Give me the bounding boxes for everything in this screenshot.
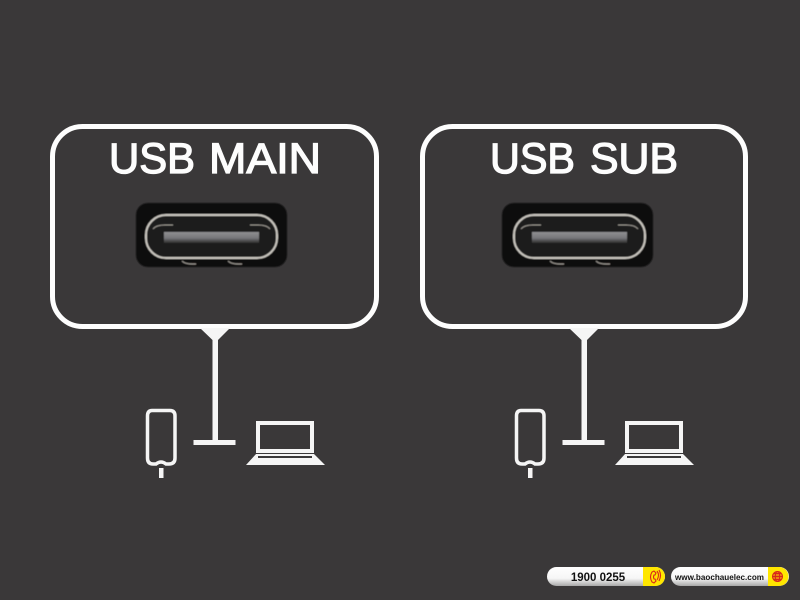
icon: phone sub — [516, 410, 544, 478]
panel outline: USB SUB — [422, 126, 746, 326]
hotline badge — [547, 567, 665, 586]
panel: USB MAIN — [52, 126, 376, 478]
connector line: USB SUB — [562, 328, 604, 445]
heading: USB MAIN — [109, 136, 321, 183]
phone number: 1900 0255 — [571, 572, 626, 584]
port: USB-C main — [136, 203, 287, 267]
panel: USB SUB — [422, 126, 746, 478]
connector line: USB MAIN — [194, 328, 236, 445]
website badge — [671, 567, 789, 586]
icon: globe — [772, 572, 782, 582]
icon: phone handset — [650, 570, 660, 583]
icon: phone main — [148, 410, 175, 478]
icon: laptop sub — [615, 423, 694, 465]
heading: USB SUB: SUB — [590, 136, 678, 183]
port: USB-C sub — [502, 203, 653, 267]
heading: USB SUB: USB — [490, 136, 575, 183]
heading: USB SUB — [490, 136, 678, 183]
panel outline: USB MAIN — [52, 126, 376, 326]
website address: www.baochauelec.com — [674, 572, 764, 582]
icon: laptop main — [246, 423, 325, 465]
heading: USB MAIN: MAIN — [209, 136, 321, 183]
heading: USB MAIN: USB — [109, 136, 195, 183]
